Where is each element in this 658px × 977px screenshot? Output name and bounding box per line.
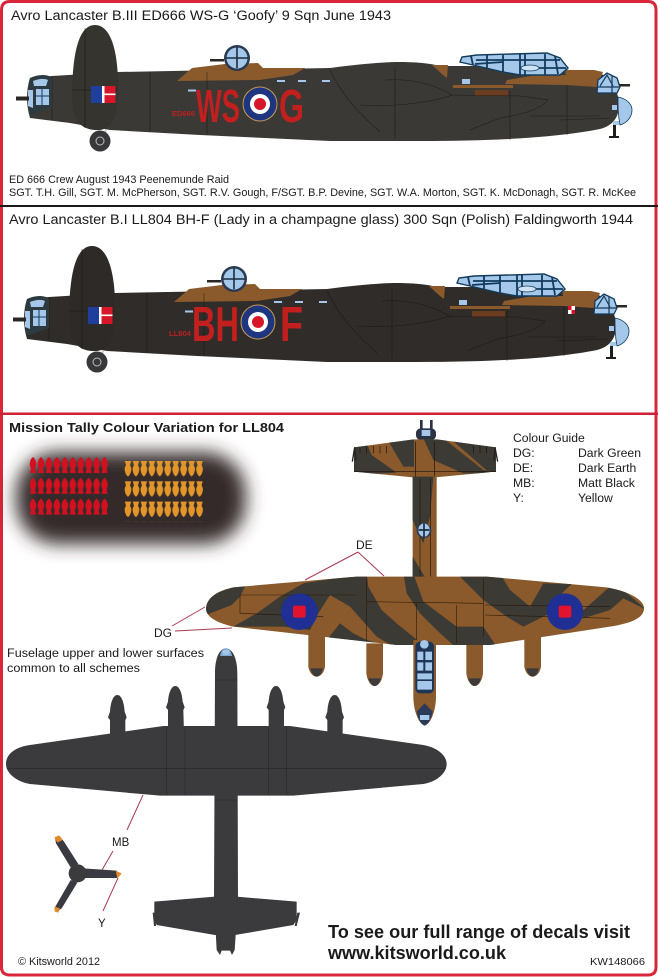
colour guide <box>513 431 641 505</box>
promo text: To see our full range of decals visit <box>328 922 630 942</box>
heading: mission tally: Mission Tally Colour Variation for LL804 <box>9 420 285 435</box>
panel: lower surface planform <box>6 648 447 955</box>
panel: LL804 side profile <box>9 212 633 372</box>
code letters WS-G with roundel <box>172 80 304 132</box>
note: fuselage surfaces: Fuselage upper and lower surfaces <box>7 646 204 660</box>
crew text: ED 666 Crew August 1943 Peenemunde Raid <box>9 174 229 186</box>
code letters BH-F with roundel: LL804 <box>169 329 192 338</box>
code letters WS-G with roundel: G <box>279 80 304 132</box>
label: DE with leader lines <box>305 538 384 580</box>
fins lower <box>153 913 300 926</box>
panel: mission tally <box>9 420 285 544</box>
note: fuselage surfaces: common to all schemes <box>7 661 140 675</box>
code letters WS-G with roundel: WS <box>196 80 240 132</box>
dark tally background <box>16 452 246 544</box>
code letters BH-F with roundel: F <box>280 298 303 352</box>
icon: three-blade propeller <box>54 835 122 913</box>
forward fuselage and canopy <box>413 640 436 726</box>
label: MB with leader <box>102 795 143 870</box>
label: Y with leader: Y <box>98 918 106 930</box>
tailplane lower <box>154 897 297 935</box>
code letters BH-F with roundel: BH <box>192 298 239 352</box>
main wing camouflage <box>203 573 647 648</box>
colour guide: Dark Earth <box>578 461 636 475</box>
rear fuselage <box>413 477 437 597</box>
divider two <box>0 412 658 415</box>
code letters BH-F with roundel <box>169 298 303 352</box>
aircraft side view ED666 <box>16 25 632 152</box>
colour guide: Matt Black <box>578 476 636 490</box>
product code: KW148066 <box>590 956 645 968</box>
promo text <box>327 922 630 963</box>
label: DG with leader lines: DG <box>154 626 172 640</box>
colour guide: Colour Guide <box>513 431 585 445</box>
label: DE with leader lines: DE <box>356 538 373 552</box>
red bomb tally <box>29 457 108 519</box>
aircraft side view LL804 <box>13 246 629 372</box>
label: DG with leader lines <box>154 607 232 640</box>
colour guide: Dark Green <box>578 446 641 460</box>
colour guide: DE: <box>513 461 533 475</box>
orange bomb tally <box>124 461 204 522</box>
fuselage lower <box>214 648 238 955</box>
engine nacelles <box>308 627 541 686</box>
colour guide: Y: <box>513 491 524 505</box>
crew text: SGT. T.H. Gill, SGT. M. McPherson, SGT. R.V. Gough, F/SGT. B.P. Devine, SGT. W.A. Morton, SGT. K. McDonagh, SGT. R. McKee <box>9 187 636 199</box>
note: fuselage surfaces <box>7 646 204 675</box>
promo text: www.kitsworld.co.uk <box>327 943 507 963</box>
crew text <box>9 174 636 199</box>
icon: Polish badge <box>568 306 575 314</box>
copyright: © Kitsworld 2012 <box>18 956 100 968</box>
colour guide: Yellow <box>578 491 613 505</box>
nacelles lower <box>108 686 344 740</box>
code letters WS-G with roundel: ED666 <box>172 109 195 118</box>
colour guide: MB: <box>513 476 535 490</box>
wing lower <box>6 726 447 796</box>
panel: upper surface planform <box>203 420 647 726</box>
title: ED666: Avro Lancaster B.III ED666 WS-G ‘Goofy’ 9 Sqn June 1943 <box>11 8 391 24</box>
colour guide: DG: <box>513 446 535 460</box>
divider one <box>0 205 658 207</box>
panel lines lower <box>7 680 446 800</box>
label: Y with leader <box>98 878 118 930</box>
tailplane <box>350 437 500 477</box>
panel: ED666 side profile <box>9 8 636 199</box>
tail turret <box>416 420 436 440</box>
title: LL804: Avro Lancaster B.I LL804 BH-F (Lady in a champagne glass) 300 Sqn (Polish) Faldingworth 1944 <box>9 212 633 228</box>
label: MB with leader: MB <box>112 837 130 849</box>
